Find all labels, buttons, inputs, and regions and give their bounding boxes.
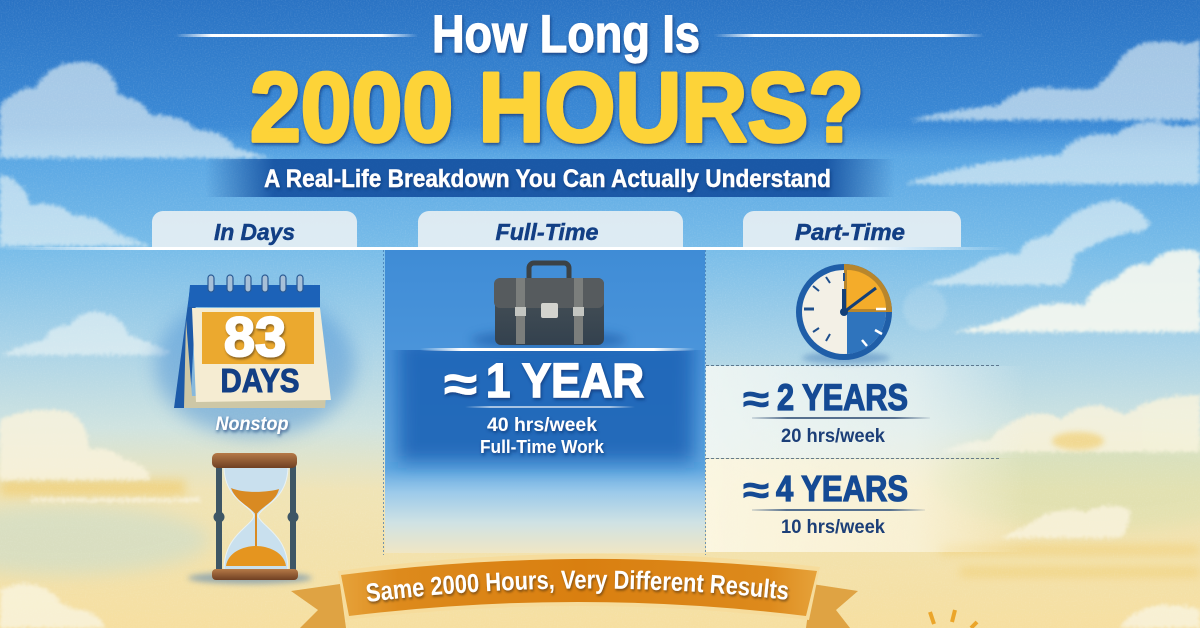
calendar halo	[155, 293, 355, 437]
icon: briefcase	[471, 263, 627, 350]
shelf line	[420, 348, 695, 351]
heading: How Long Is: How Long Is	[432, 5, 700, 64]
label: Nonstop: Nonstop	[216, 414, 288, 435]
ribbon tails	[291, 584, 858, 628]
rule	[752, 417, 930, 419]
stat: 2 years	[743, 377, 908, 421]
panel: part-time	[706, 264, 1000, 538]
text: Full-Time Work: Full-Time Work	[480, 437, 605, 457]
divider	[706, 458, 1000, 460]
subtitle: A Real-Life Breakdown You Can Actually Understand	[264, 165, 831, 193]
banner: Same 2000 Hours, Very Different Results: Same 2000 Hours, Very Different Results	[366, 570, 790, 605]
divider	[706, 364, 1000, 366]
panel: in days	[155, 275, 355, 584]
header rule	[0, 247, 1010, 250]
tab: Part-Time: Part-Time	[795, 219, 905, 245]
icon: clock	[796, 264, 892, 364]
stat: approx 1 year: ≈	[444, 356, 477, 412]
panel: full-time background	[385, 250, 705, 553]
icon: calendar: DAYS	[220, 362, 300, 399]
stat: 2 years: ≈	[743, 379, 769, 421]
heading rules	[175, 34, 984, 37]
panel: full-time	[398, 263, 695, 462]
text: 10 hrs/week: 10 hrs/week	[781, 517, 885, 538]
stat: 4 years: ≈	[743, 470, 769, 512]
panel: part-time light area	[706, 366, 1026, 552]
icon: calendar: 83	[224, 305, 286, 368]
text: 20 hrs/week: 20 hrs/week	[781, 426, 885, 447]
icon: calendar	[174, 275, 331, 408]
stat: 4 years: 4 YEARS	[776, 468, 908, 509]
heading: 2000 HOURS?: 2000 HOURS?	[250, 52, 864, 162]
text: 40 hrs/week: 40 hrs/week	[487, 415, 597, 436]
icon: sun rays	[930, 610, 977, 628]
stat: approx 1 year	[444, 355, 644, 412]
tab: Full-Time: Full-Time	[496, 219, 599, 245]
rule	[752, 509, 925, 511]
stat: approx 1 year: 1 YEAR	[486, 355, 644, 408]
banner: Same 2000 Hours, Very Different Results	[291, 554, 858, 628]
column dividers	[384, 250, 706, 555]
tab: Full-Time	[418, 211, 683, 247]
tab: In Days	[152, 211, 357, 247]
icon: hourglass	[188, 453, 312, 584]
highlight band	[398, 338, 694, 462]
tab: In Days: In Days	[214, 219, 295, 245]
stat: 2 years: 2 YEARS	[777, 377, 908, 418]
stat: 4 years	[743, 468, 908, 512]
rule below stat	[465, 406, 635, 408]
title block	[175, 5, 984, 197]
subtitle band	[205, 159, 895, 197]
tab: Part-Time	[743, 211, 961, 247]
